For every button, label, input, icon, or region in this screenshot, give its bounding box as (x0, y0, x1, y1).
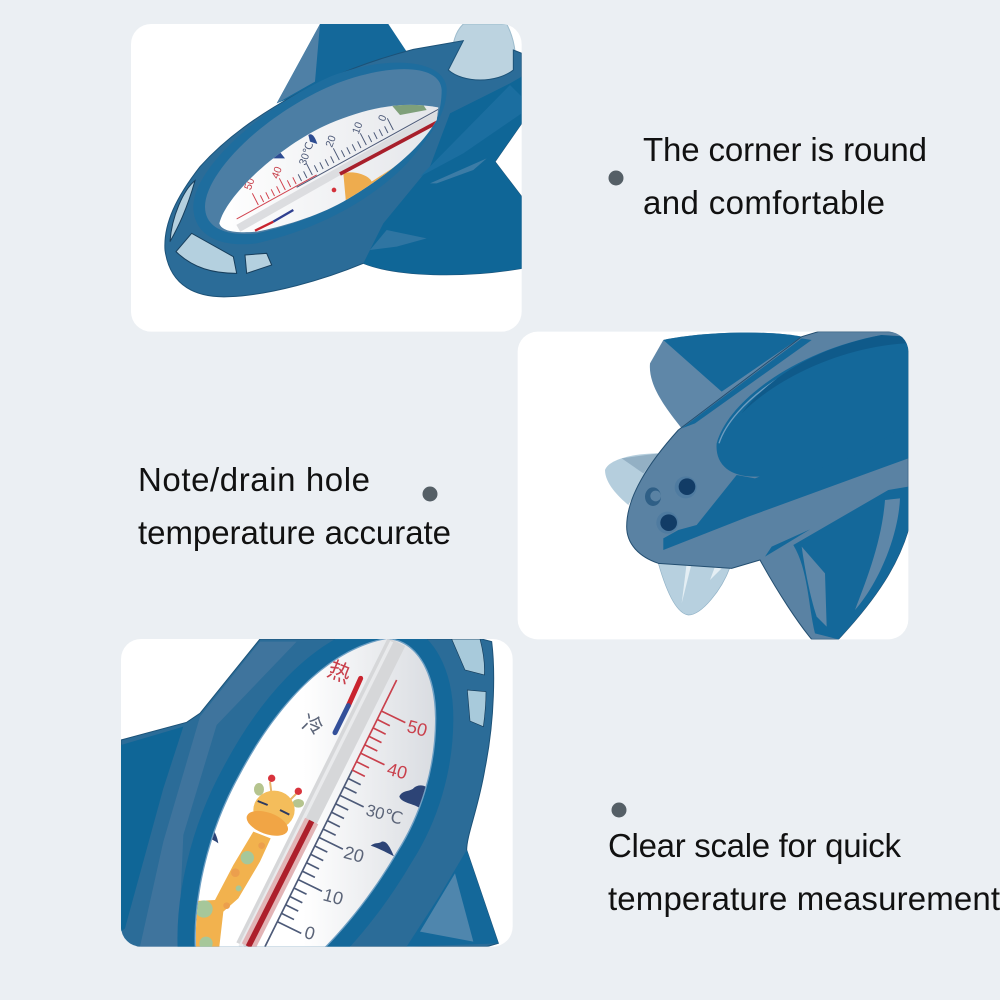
panel: top thermometer view (131, 24, 522, 332)
scale numbers: 20 (324, 134, 339, 149)
scale numbers: 30℃ (364, 801, 405, 828)
scale numbers: 10 (350, 120, 366, 136)
scale numbers (242, 113, 390, 192)
scale line (237, 175, 317, 219)
scale numbers: 40 (270, 165, 285, 180)
scale numbers: 20 (342, 842, 366, 867)
text: corner callout: and comfortable (643, 184, 885, 221)
scale numbers: 10 (321, 885, 345, 909)
red liquid column (340, 122, 438, 174)
oval recess (717, 335, 908, 477)
drain holes (645, 476, 697, 534)
top fin (650, 333, 802, 428)
glass tube (240, 642, 397, 947)
scale numbers: 40 (385, 759, 409, 783)
oval rim (196, 639, 435, 948)
text: drain hole callout: temperature accurate (138, 514, 451, 551)
top fin (277, 24, 407, 103)
oval rim (193, 63, 447, 244)
clouds (195, 785, 428, 856)
label: cold: 冷 (299, 711, 327, 740)
scale numbers: 50 (242, 176, 258, 192)
dot: middle callout (422, 486, 438, 502)
dial face (219, 100, 438, 232)
text: scale callout: temperature measurement (608, 880, 1000, 917)
red liquid column (248, 821, 312, 947)
dot: bottom callout (612, 802, 626, 818)
hot/cold bar (255, 222, 273, 231)
scale numbers: 0 (302, 922, 317, 944)
scale numbers: 30℃ (297, 141, 316, 167)
bottom cone (658, 563, 730, 615)
panel: drain holes view (518, 332, 908, 639)
ticks (352, 711, 405, 776)
scale line (352, 680, 397, 770)
scale numbers: 50 (405, 716, 429, 741)
panel: scale close-up (121, 639, 513, 950)
giraffe (195, 775, 304, 950)
rear windows (452, 639, 486, 727)
ticks (252, 177, 296, 205)
dial face (195, 639, 435, 950)
aircraft body (165, 41, 522, 297)
aircraft body (627, 332, 908, 639)
text: scale callout: Clear scale for quick (608, 827, 902, 864)
giraffe (332, 104, 426, 200)
scale numbers (302, 716, 429, 944)
clouds (273, 134, 318, 158)
dot: top callout (608, 170, 624, 186)
text: drain hole callout: Note/drain hole (138, 461, 370, 498)
text: corner callout (643, 131, 927, 221)
scale numbers: 0 (376, 113, 390, 123)
left cone (605, 453, 658, 505)
text: drain hole callout (138, 461, 451, 551)
hot cold bar (335, 678, 361, 733)
windows (170, 181, 272, 273)
text: scale callout (608, 827, 1000, 917)
label: hot: 热 (324, 656, 355, 688)
text: corner callout: The corner is round (643, 131, 927, 168)
aircraft body (121, 639, 498, 947)
rear cone (448, 24, 515, 81)
glass tube (238, 115, 438, 228)
